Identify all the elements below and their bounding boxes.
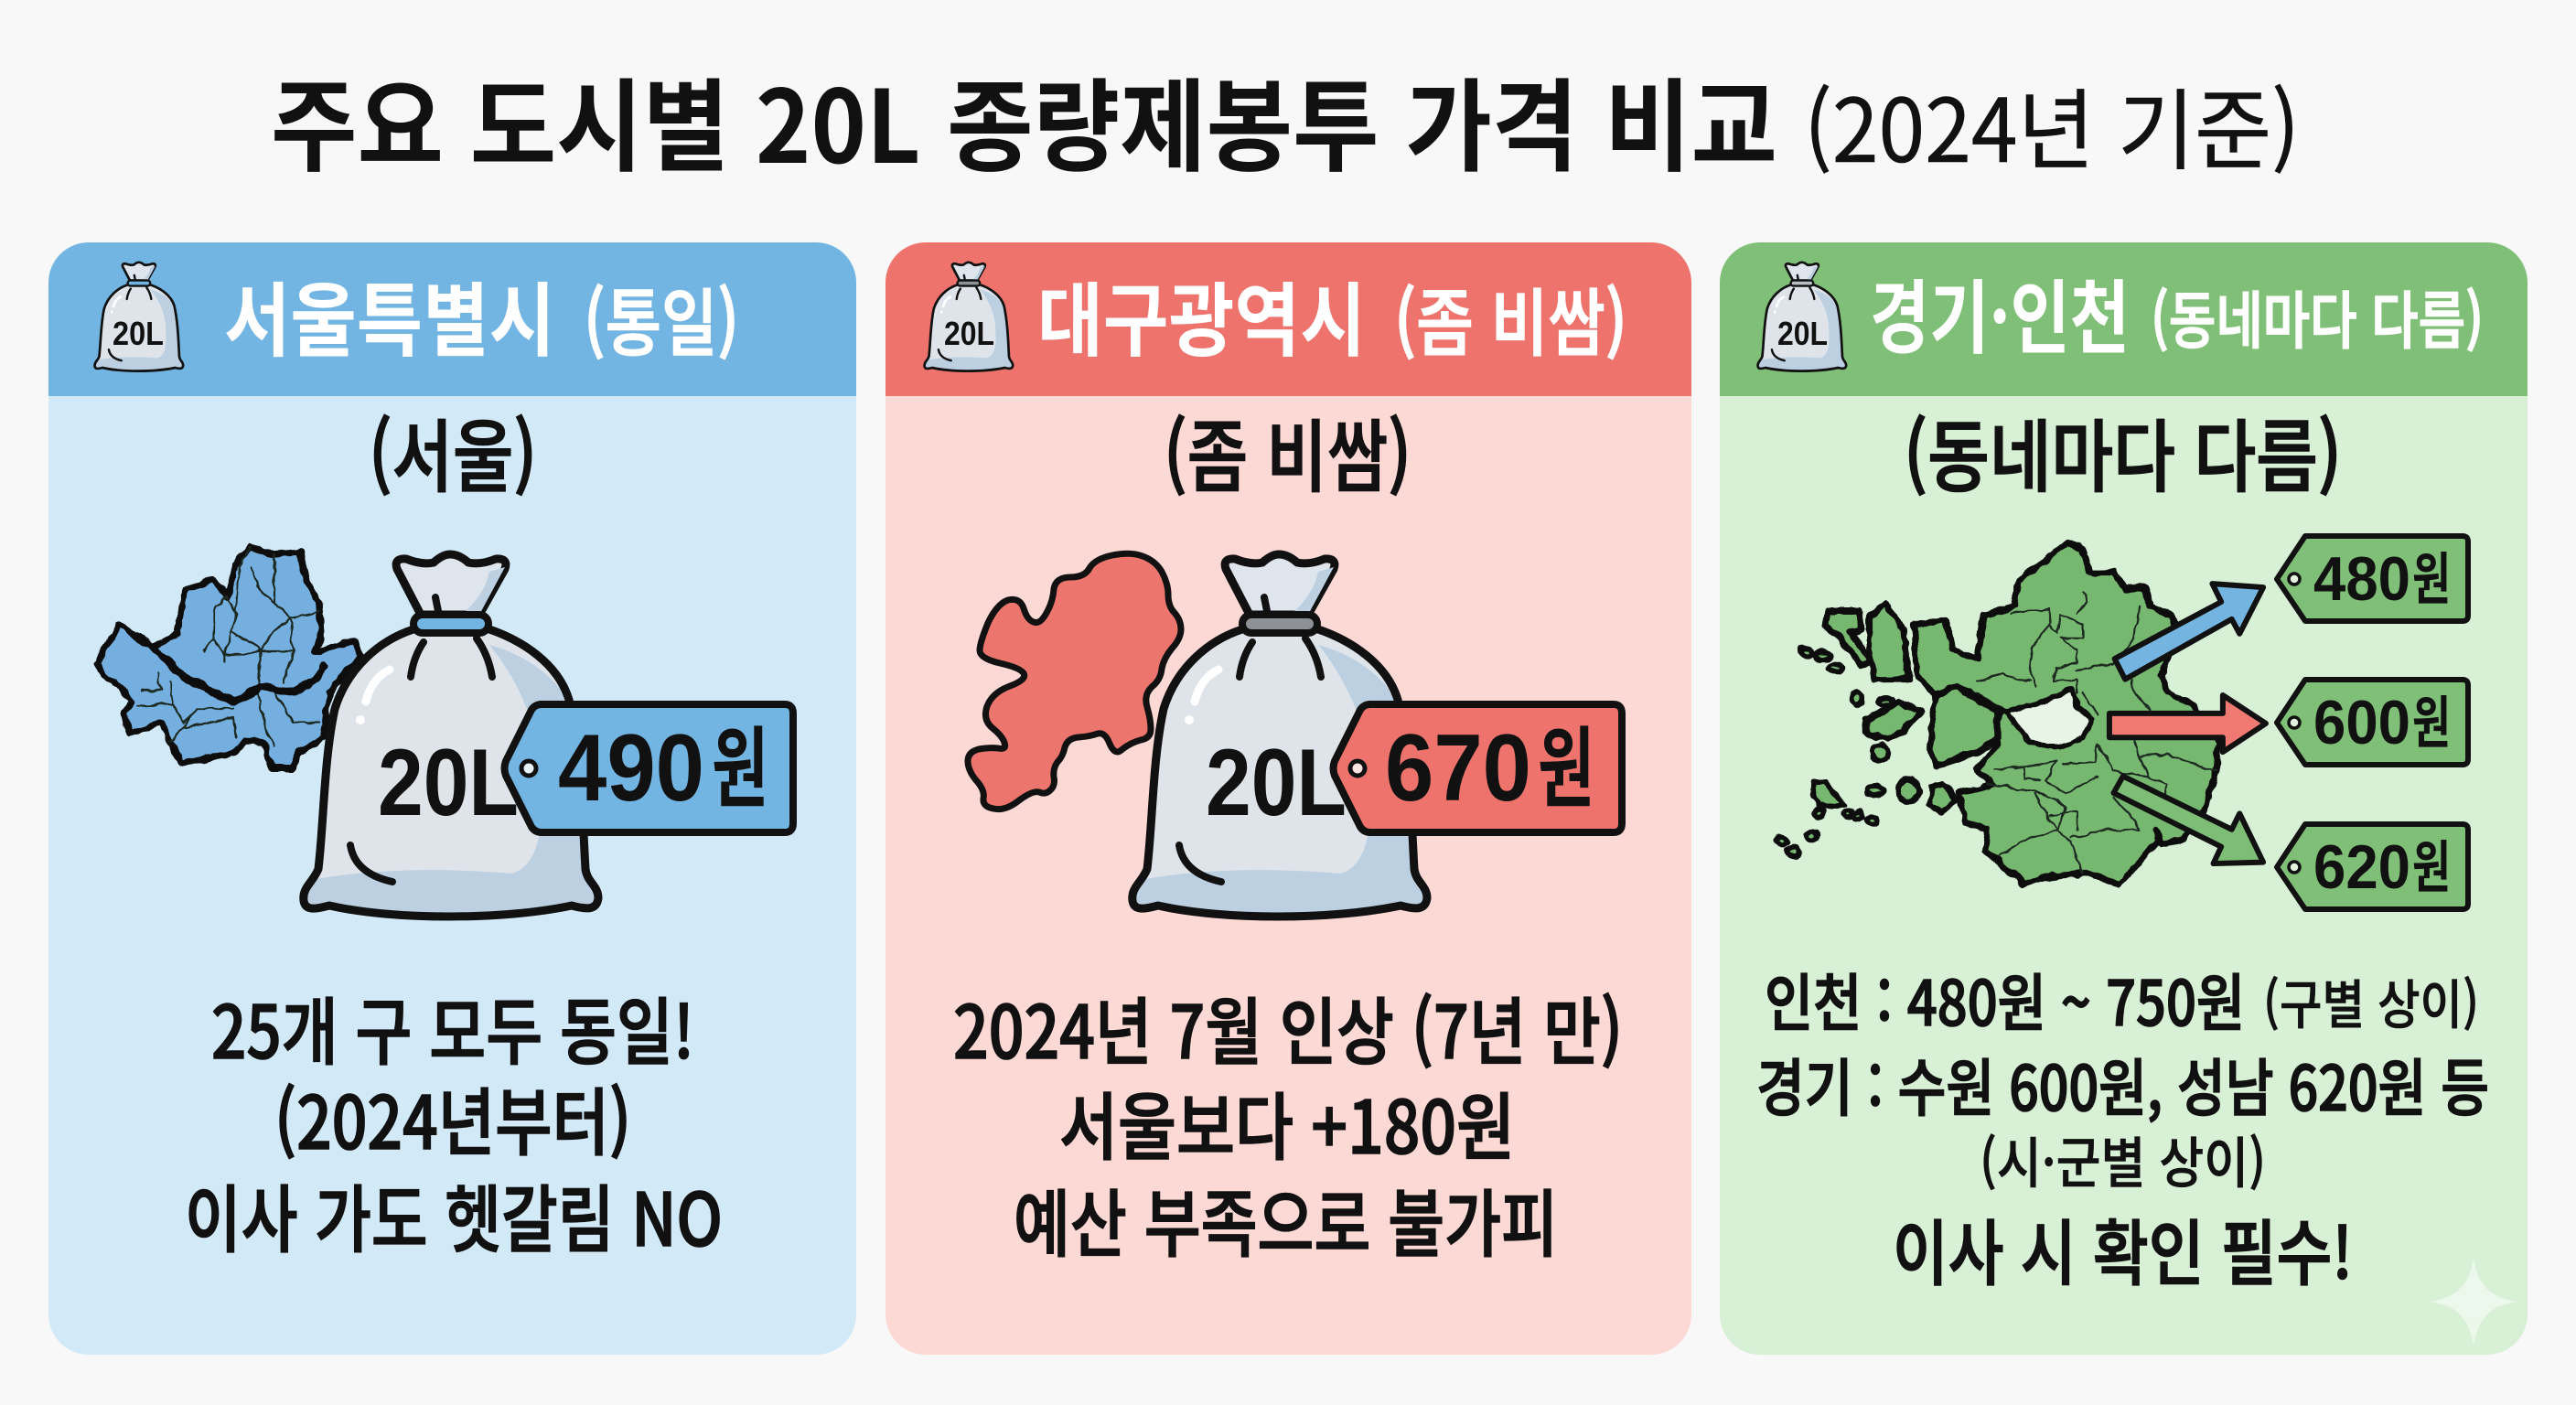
title: 주요 도시별 20L 종량제봉투 가격 비교 <box>271 46 1777 192</box>
price tag: 620원: 620 <box>2313 832 2410 902</box>
panel header: Gyeonggi-Incheon <box>1720 242 2528 396</box>
price tag: 670원: 원 <box>1538 698 1594 825</box>
map: Daegu outline <box>968 553 1181 810</box>
icon: small bag <box>95 263 183 371</box>
subheading: Gyeonggi-Incheon: (동네마다 다름) <box>1904 393 2342 508</box>
map: Gyeonggi and Incheon <box>1776 542 2218 884</box>
icon: small bag <box>1758 263 1846 371</box>
price tag: 490원: 원 <box>712 698 768 825</box>
panel body: Gyeonggi-Incheon <box>1720 242 2528 1355</box>
icon: small bag <box>925 263 1013 371</box>
title: (2024년 기준) <box>1804 60 2300 188</box>
icon: large bag <box>1132 554 1427 917</box>
icon label: 20L: 20L <box>944 315 994 352</box>
header title: Gyeonggi-Incheon: 경기·인천 <box>1870 254 2130 370</box>
panel: 경기·인천 <box>1720 242 2528 1355</box>
price tag: 600원 <box>2277 677 2468 765</box>
body text: Seoul: 25개 구 모두 동일! <box>211 974 694 1080</box>
price tag: 600원: 원 <box>2412 677 2451 759</box>
header title: Daegu <box>1037 257 1627 373</box>
body text: Gyeonggi-Incheon: (시·군별 상이) <box>1980 1120 2266 1199</box>
body text: Daegu: 서울보다 +180원 <box>1059 1069 1515 1175</box>
arrow: red to 600원 <box>2109 695 2266 752</box>
price tag: 480원: 원 <box>2412 533 2451 616</box>
header title: Seoul: (통일) <box>584 265 739 371</box>
price tag: 490원: 490 <box>558 715 704 821</box>
price tag: 490원 <box>505 698 793 832</box>
panel header: Seoul <box>48 242 856 396</box>
header title: Seoul: 서울특별시 <box>224 257 555 373</box>
body text: Daegu: 2024년 7월 인상 (7년 만) <box>953 974 1623 1080</box>
body text: Gyeonggi-Incheon: 이사 시 확인 필수! <box>1893 1197 2353 1300</box>
body text: Gyeonggi-Incheon: 인천 : 480원 ~ 750원 <box>1765 953 2245 1044</box>
body text: Seoul: 이사 가도 헷갈림 NO <box>185 1162 723 1268</box>
header title: Daegu: 대구광역시 <box>1037 257 1366 373</box>
price tag: 480원 <box>2277 533 2468 621</box>
arrow: green to 620원 <box>2113 777 2263 863</box>
body text: Daegu: 예산 부족으로 불가피 <box>1014 1166 1558 1272</box>
body text: Seoul <box>185 974 723 1268</box>
bag label: 20L: 20L <box>1206 730 1347 836</box>
bag label: 20L: 20L <box>378 730 519 836</box>
map: Seoul districts <box>96 547 360 768</box>
panel: 서울특별시 <box>48 242 856 1355</box>
panel body: Daegu <box>886 242 1691 1355</box>
icon: large bag <box>304 554 598 917</box>
price tag: 480원: 480 <box>2313 544 2410 614</box>
header title: Gyeonggi-Incheon <box>1870 254 2484 370</box>
panel body: Seoul <box>48 242 856 1355</box>
price tag: 620원: 원 <box>2412 821 2451 904</box>
body text: Daegu <box>953 974 1623 1272</box>
icon label: 20L: 20L <box>1777 315 1828 352</box>
icon: sparkle watermark <box>2430 1258 2517 1346</box>
body text: Gyeonggi-Incheon <box>1756 953 2489 1300</box>
body text: Seoul: (2024년부터) <box>274 1065 631 1171</box>
panel header: Daegu <box>886 242 1691 396</box>
price tag: 620원 <box>2277 821 2468 909</box>
header title: Gyeonggi-Incheon: (동네마다 다름) <box>2151 271 2484 361</box>
subheading: Daegu: (좀 비쌈) <box>1164 393 1411 508</box>
subheading: Seoul: (서울) <box>369 393 537 508</box>
price tag: 670원 <box>1334 698 1622 832</box>
header title: Daegu: (좀 비쌈) <box>1394 265 1627 371</box>
panel: 대구광역시 <box>886 242 1691 1355</box>
body text: Gyeonggi-Incheon: (구별 상이) <box>2263 962 2479 1039</box>
price tag: 670원: 670 <box>1385 715 1531 821</box>
icon label: 20L: 20L <box>113 315 164 352</box>
arrow: blue to 480원 <box>2115 584 2263 680</box>
price tag: 600원: 600 <box>2313 688 2410 757</box>
